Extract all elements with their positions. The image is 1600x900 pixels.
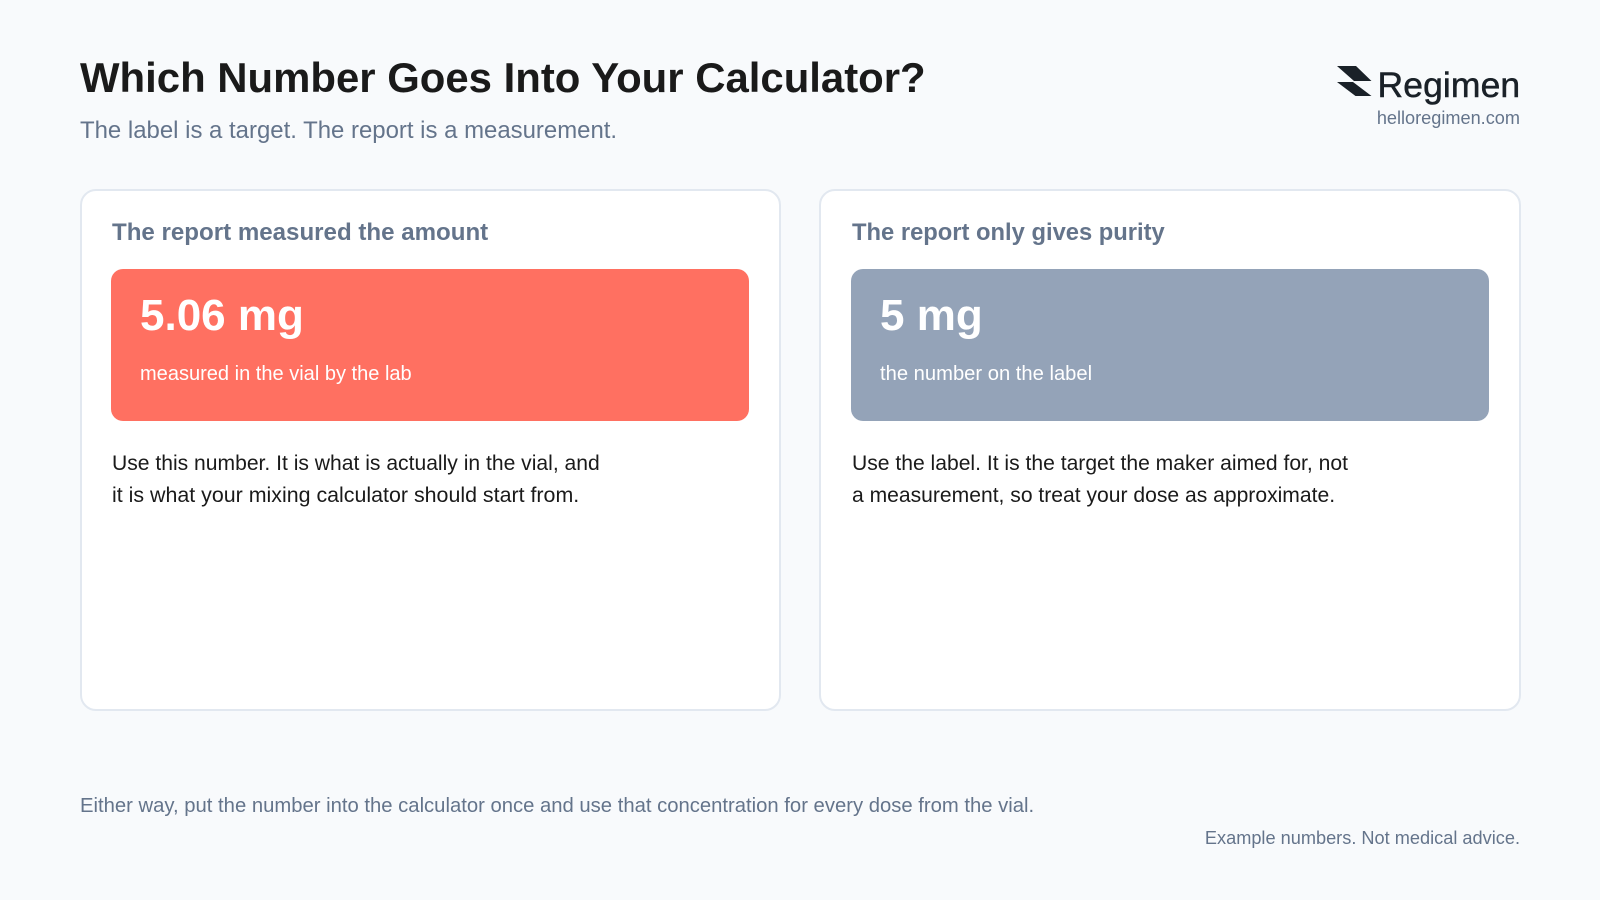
callout: 5 mg	[851, 269, 1489, 421]
explanation text: Use the label. It is the target the maker aimed for, not	[852, 452, 1348, 475]
footer note: Either way, put the number into the calculator once and use that concentration for every dose from the vial.	[80, 795, 1034, 817]
panel: report only gives purity	[819, 189, 1521, 711]
callout: 5.06 mg	[111, 269, 749, 421]
title: Which Number Goes Into Your Calculator?	[80, 54, 926, 100]
brand name: Regimen	[1378, 64, 1520, 104]
website: helloregimen.com	[1377, 108, 1520, 128]
logo: Regimen	[1337, 64, 1520, 128]
value: 5.06 mg	[140, 290, 304, 340]
icon: logo mark	[1337, 66, 1372, 96]
value: 5 mg	[880, 290, 983, 340]
explanation text	[852, 452, 1348, 507]
panel: report measured the amount	[80, 189, 781, 711]
disclaimer: Example numbers. Not medical advice.	[1205, 828, 1520, 848]
value caption: the number on the label	[880, 363, 1092, 385]
explanation text: a measurement, so treat your dose as approximate.	[852, 484, 1335, 507]
panel heading: The report only gives purity	[852, 218, 1165, 246]
explanation text	[112, 452, 600, 507]
value caption: measured in the vial by the lab	[140, 363, 412, 385]
panel heading: The report measured the amount	[112, 218, 488, 246]
subtitle: The label is a target. The report is a measurement.	[80, 117, 617, 144]
explanation text: it is what your mixing calculator should start from.	[112, 483, 579, 507]
explanation text: Use this number. It is what is actually in the vial, and	[112, 452, 600, 475]
